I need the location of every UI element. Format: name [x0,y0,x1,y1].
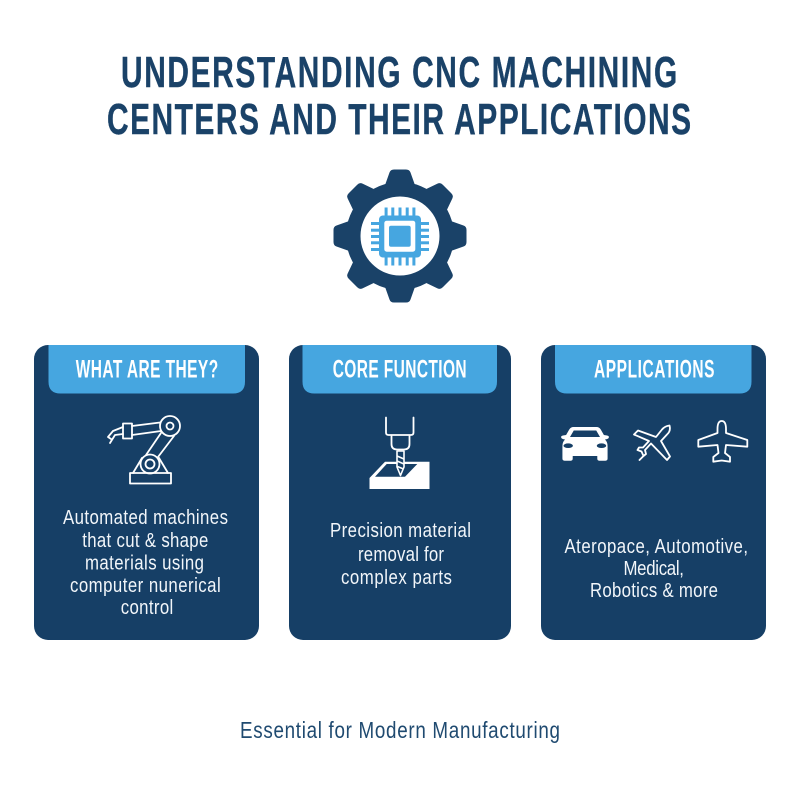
heading: core function: CORE FUNCTION [333,356,467,384]
footer tagline: Essential for Modern Manufacturing [240,717,560,744]
text: what are they description: Automated machines [63,506,228,528]
panel: applications [541,345,766,640]
panel: core function [289,345,511,640]
text: core function description: complex parts [341,566,452,588]
title: CENTERS AND THEIR APPLICATIONS [107,94,691,143]
icon: plane diagonal [634,426,670,460]
text: applications description: Medical, [624,557,684,579]
icon: drill and workpiece [370,418,430,489]
icon: robot arm [108,416,180,484]
panel: what are they [34,345,259,640]
text: what are they description: that cut & shape [82,529,208,551]
text: applications description: Ateropace, Automotive, [564,535,748,557]
text: core function description [330,519,471,588]
title: UNDERSTANDING CNC MACHINING [121,47,677,96]
text: applications description: Robotics & more [590,579,718,601]
text: what are they description: materials using [85,551,204,574]
text: what are they description: control [121,596,173,618]
icon: plane upright [698,421,747,462]
icon: gear with microchip [334,170,466,302]
heading: applications: APPLICATIONS [594,356,715,384]
text: what are they description: computer nunerical [70,574,221,596]
text: core function description: removal for [358,543,444,565]
text: what are they description [63,506,228,618]
text: applications description [564,535,748,601]
title [107,47,691,143]
header: applications [555,345,752,394]
icon: car [561,427,609,461]
header: core function [302,345,497,394]
text: core function description: Precision material [330,519,471,541]
heading: what are they: WHAT ARE THEY? [76,356,218,384]
header: what are they [48,345,245,394]
